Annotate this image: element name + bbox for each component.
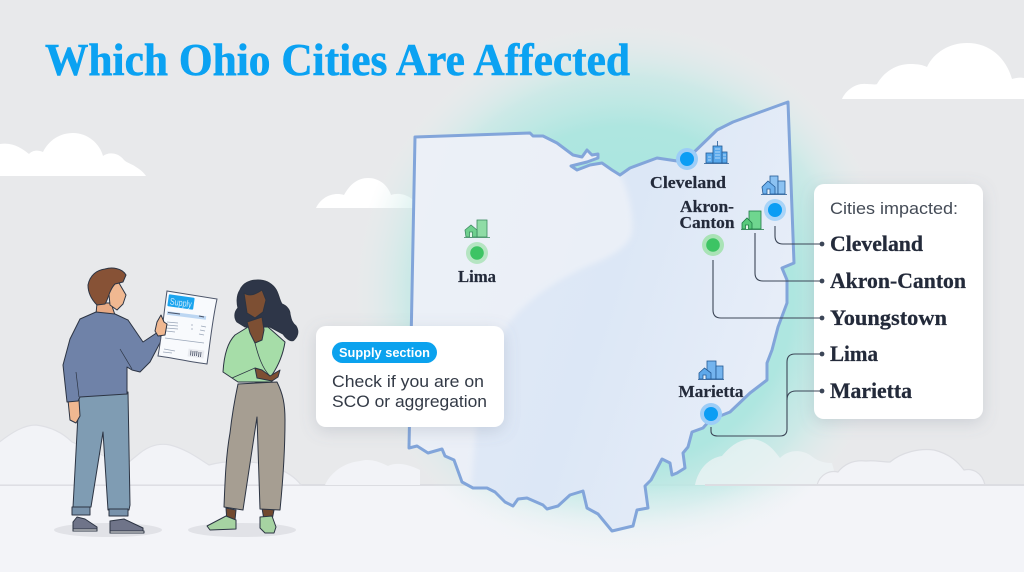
icon: Youngstown buildings	[761, 176, 787, 194]
icon: Akron-Canton buildings	[741, 211, 764, 230]
figure shadows	[54, 523, 296, 537]
marker: Marietta	[700, 403, 722, 425]
bill lines	[163, 312, 206, 358]
cloud: middle behind map	[316, 178, 420, 208]
marker: Akron-Canton	[702, 234, 724, 256]
badge: supply section	[332, 342, 437, 363]
woman: trousers	[224, 382, 285, 510]
callout text: Check if you are on	[332, 372, 484, 391]
connector lines	[711, 226, 824, 436]
city labels on map: Cleveland	[650, 173, 727, 192]
icon: Marietta buildings	[698, 361, 724, 380]
figure: man holding bill	[63, 268, 162, 533]
cloud: top right	[842, 43, 1024, 99]
man: cuffs	[72, 507, 128, 516]
marker: Youngstown	[764, 199, 786, 221]
woman: ankles	[226, 508, 274, 522]
city list: Akron-Canton	[830, 268, 966, 293]
clouds: low right	[695, 439, 838, 485]
city labels on map	[458, 173, 744, 401]
cloud: outlined right	[817, 450, 985, 485]
city list: Marietta	[830, 378, 912, 403]
cloud: top left	[0, 133, 146, 176]
figure: woman thinking	[207, 280, 298, 533]
city labels on map: Lima	[458, 267, 496, 286]
glow behind map	[353, 23, 897, 567]
man: sweater	[63, 312, 162, 402]
woman: arm and hand on chin	[247, 317, 264, 343]
bill document	[158, 291, 217, 364]
woman: shoes	[207, 516, 276, 533]
city list: Cleveland	[830, 231, 923, 256]
marker: Cleveland	[676, 148, 698, 170]
city list	[830, 231, 966, 403]
callout: supply section	[316, 326, 504, 427]
marker: Lima	[466, 242, 488, 264]
woman: top	[223, 327, 285, 382]
card: cities impacted	[814, 184, 983, 419]
city labels on map: Akron-	[680, 197, 734, 216]
city labels on map: Canton	[680, 213, 735, 232]
map outline	[409, 102, 794, 531]
man: jeans	[73, 392, 130, 510]
badge: supply section: Supply section	[339, 346, 430, 360]
callout text: SCO or aggregation	[332, 392, 487, 411]
city list: Youngstown	[830, 305, 947, 330]
woman: hair	[235, 280, 298, 341]
man: neck	[96, 303, 115, 315]
title: Which Ohio Cities Are Affected	[45, 35, 630, 85]
city labels on map: Marietta	[678, 382, 744, 401]
woman: hand on arm	[255, 368, 280, 381]
bill tag: Supply	[169, 297, 193, 310]
card heading: Cities impacted:	[830, 199, 958, 218]
map lighter northwest region	[410, 135, 632, 484]
man: hand	[68, 400, 80, 423]
floor wash	[0, 486, 1024, 572]
man: shoes	[73, 517, 144, 533]
woman: face	[244, 290, 266, 318]
man: face	[108, 283, 126, 310]
clouds: low centre	[325, 460, 420, 485]
man: hand holding bill	[155, 315, 167, 336]
icon: Cleveland buildings	[704, 141, 729, 164]
callout text	[332, 372, 487, 411]
clouds: low left	[0, 425, 301, 485]
icon: Lima buildings	[464, 220, 490, 238]
map of Ohio	[400, 102, 794, 531]
man: hair	[88, 268, 126, 305]
city list: Lima	[830, 341, 878, 366]
